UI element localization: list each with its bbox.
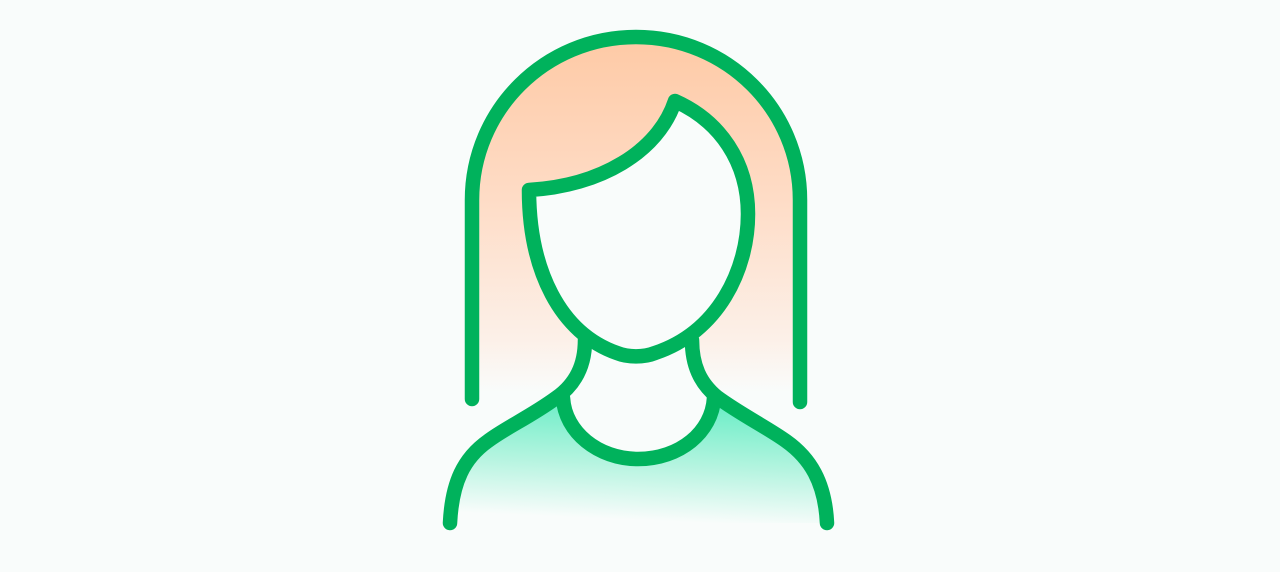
right neck and shoulder <box>692 340 827 523</box>
icon: shirt fill <box>450 397 827 523</box>
face and fringe outline <box>529 101 748 356</box>
collar <box>563 398 714 459</box>
hair outline <box>472 37 800 402</box>
icon: hair fill <box>472 37 800 403</box>
left neck and shoulder <box>450 340 585 523</box>
icon: avatar outline <box>450 37 827 523</box>
